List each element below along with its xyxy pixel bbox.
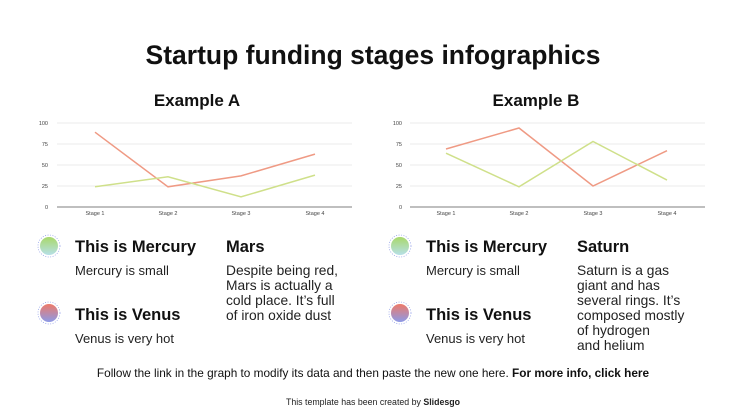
chart A: Stage 1 bbox=[86, 211, 104, 217]
chart B: 100 bbox=[393, 121, 402, 127]
title: Startup funding stages infographics bbox=[146, 40, 600, 70]
icon: green circle A bbox=[38, 235, 60, 257]
legend B: This is Mercury bbox=[426, 238, 548, 256]
legend A: This is Venus bbox=[75, 306, 180, 324]
legend B: several rings. It’s bbox=[577, 293, 680, 308]
legend A: Mars is actually a bbox=[226, 278, 333, 293]
legend B: Saturn is a gas bbox=[577, 263, 669, 278]
chart B: 50 bbox=[396, 163, 402, 169]
legend A: Mercury is small bbox=[75, 263, 169, 278]
legend B: composed mostly bbox=[577, 308, 684, 323]
icon: red circle B bbox=[389, 302, 411, 324]
legend A bbox=[38, 235, 338, 346]
chart A: Stage 2 bbox=[159, 211, 177, 217]
chart B: 0 bbox=[399, 205, 402, 211]
legend B: Saturn bbox=[577, 238, 629, 256]
legend B: Venus is very hot bbox=[426, 331, 525, 346]
chart A: 0 bbox=[45, 205, 48, 211]
legend B: giant and has bbox=[577, 278, 660, 293]
legend B: This is Venus bbox=[426, 306, 531, 324]
chart A: 50 bbox=[42, 163, 48, 169]
chart B: 75 bbox=[396, 142, 402, 148]
icon: red circle A bbox=[38, 302, 60, 324]
icon: green circle B bbox=[389, 235, 411, 257]
chart A bbox=[39, 121, 352, 217]
legend A: Mars bbox=[226, 238, 265, 256]
chart A: Stage 3 bbox=[232, 211, 250, 217]
legend A: This is Mercury bbox=[75, 238, 197, 256]
legend B bbox=[389, 235, 684, 353]
legend B: and helium bbox=[577, 338, 644, 353]
chart A: 25 bbox=[42, 184, 48, 190]
chart B: 25 bbox=[396, 184, 402, 190]
legend A: Venus is very hot bbox=[75, 331, 174, 346]
chart A: 75 bbox=[42, 142, 48, 148]
chart B: Stage 2 bbox=[510, 211, 528, 217]
legend A: of iron oxide dust bbox=[226, 308, 331, 323]
legend B: Mercury is small bbox=[426, 263, 520, 278]
legend B: of hydrogen bbox=[577, 323, 650, 338]
heading: Example A: Example A bbox=[154, 91, 240, 110]
chart B bbox=[393, 121, 705, 217]
chart B: Stage 3 bbox=[584, 211, 602, 217]
chart A: Stage 4 bbox=[306, 211, 324, 217]
heading: Example B: Example B bbox=[493, 91, 579, 110]
chart B: Stage 4 bbox=[658, 211, 676, 217]
chart A: 100 bbox=[39, 121, 48, 127]
legend A: cold place. It’s full bbox=[226, 293, 335, 308]
footer note: Follow the link in the graph to modify its data and then paste the new one here. For more info, click here bbox=[97, 366, 650, 380]
credit: This template has been created by Slidesgo bbox=[286, 397, 461, 407]
legend A: Despite being red, bbox=[226, 263, 338, 278]
chart B: Stage 1 bbox=[437, 211, 455, 217]
